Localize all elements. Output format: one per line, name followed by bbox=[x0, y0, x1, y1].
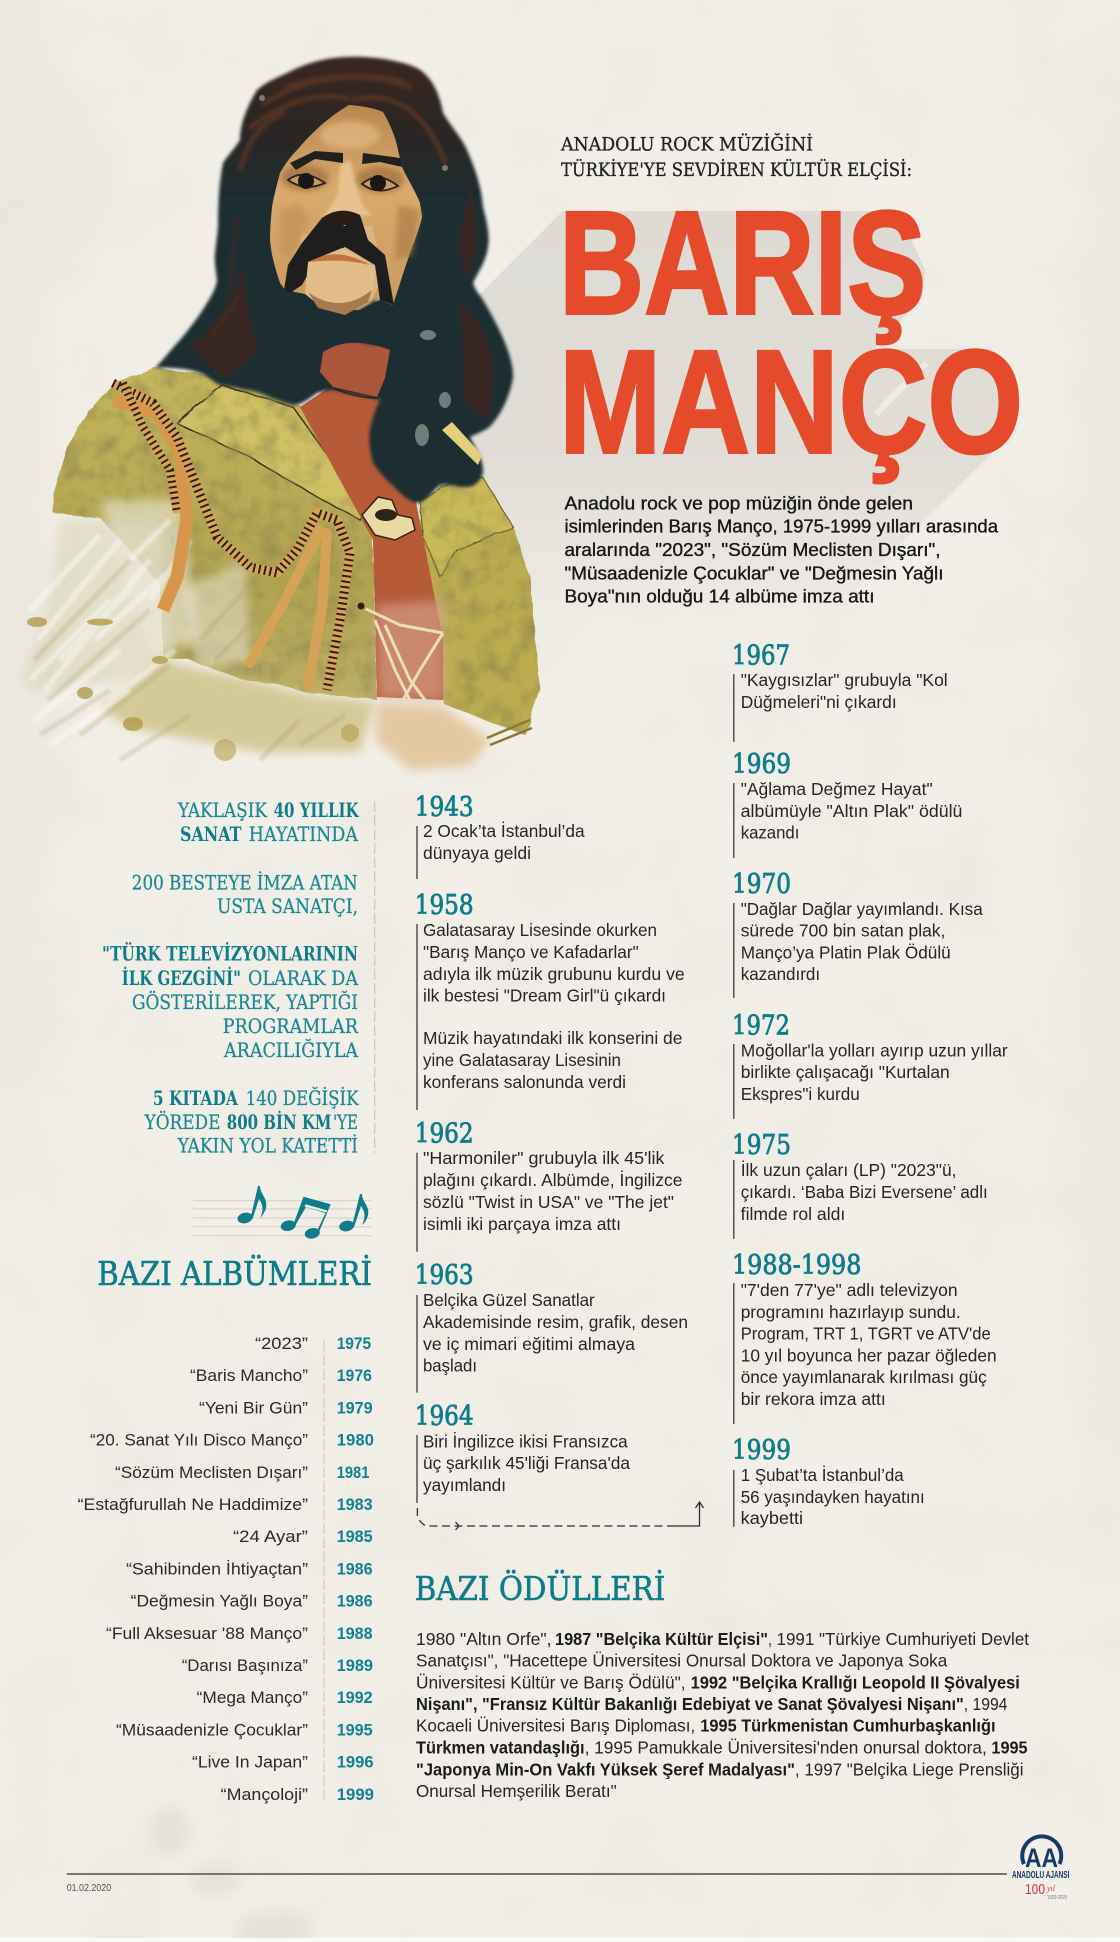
timeline entry: 1988-1998: 10 yıl boyunca her pazar öğleden bbox=[741, 1346, 997, 1366]
album list: “Baris Mancho” bbox=[190, 1366, 308, 1385]
album list: 1999 bbox=[337, 1785, 374, 1804]
album list: “Full Aksesuar '88 Manço” bbox=[106, 1624, 308, 1643]
intro paragraph: Anadolu rock ve pop müziğin önde gelen bbox=[564, 493, 913, 513]
timeline entry: 1958: Müzik hayatındaki ilk konserini de bbox=[423, 1028, 682, 1048]
portrait: eyelet bbox=[356, 602, 366, 610]
timeline entry: 1967 bbox=[732, 640, 948, 742]
portrait: paint smudges bbox=[27, 617, 359, 761]
timeline entry: 1964 bbox=[415, 1401, 630, 1503]
album list: “2023” bbox=[255, 1334, 308, 1353]
album list: “Live In Japan” bbox=[192, 1753, 308, 1772]
timeline entry: 1970: Manço’ya Platin Plak Ödülü bbox=[741, 942, 951, 962]
timeline entry: 1969: 1969 bbox=[732, 749, 791, 780]
album list: “Mega Manço” bbox=[197, 1688, 308, 1707]
awards paragraph: 1980 "Altın Orfe", bbox=[416, 1629, 552, 1649]
awards paragraph: Nişanı", "Fransız Kültür Bakanlığı Edebiyat ve Sanat Şövalyesi Nişanı" bbox=[416, 1694, 964, 1714]
awards paragraph: 1987 "Belçika Kültür Elçisi" bbox=[555, 1629, 768, 1649]
Anadolu Ajansi logo: ANADOLU AJANSI bbox=[1012, 1870, 1070, 1881]
timeline entry: 1970: sürede 700 bin satan plak, bbox=[741, 921, 945, 941]
portrait: orange shirt bbox=[300, 385, 443, 700]
timeline entry: 1988-1998: "7'den 77'ye" adlı televizyon bbox=[741, 1280, 958, 1300]
album list: 1976 bbox=[337, 1366, 372, 1385]
portrait: striped cord bbox=[113, 383, 350, 690]
timeline entry: 1975: 1975 bbox=[732, 1130, 791, 1161]
career summary statements: HAYATINDA bbox=[249, 823, 359, 846]
long shadow behind title bbox=[124, 211, 1020, 650]
timeline entry: 1963: Akademisinde resim, grafik, desen bbox=[423, 1312, 688, 1332]
timeline entry: 1958: "Barış Manço ve Kafadarlar" bbox=[423, 942, 639, 962]
timeline entry: 1988-1998 bbox=[732, 1250, 997, 1424]
awards paragraph: Üniversitesi Kültür ve Barış Ödülü", bbox=[416, 1672, 686, 1692]
timeline entry: 1972: birlikte çalışacağı "Kurtalan bbox=[741, 1062, 950, 1082]
awards paragraph: , bbox=[768, 1629, 772, 1649]
timeline entry: 1943: dünyaya geldi bbox=[423, 843, 531, 863]
title bbox=[559, 182, 1023, 484]
timeline entry: 1999: kaybetti bbox=[741, 1508, 803, 1528]
awards paragraph: , 1994 bbox=[964, 1694, 1008, 1714]
career summary statements: 200 BESTEYE İMZA ATAN bbox=[132, 870, 358, 894]
timeline entry: 1962: sözlü "Twist in USA" ve "The jet" bbox=[423, 1192, 674, 1212]
awards paragraph: 1995 bbox=[991, 1737, 1028, 1757]
timeline entry: 1970: kazandırdı bbox=[741, 964, 820, 984]
timeline entry: 1962: 1962 bbox=[415, 1119, 474, 1150]
awards paragraph: Türkmen vatandaşlığı bbox=[416, 1737, 585, 1757]
timeline entry: 1988-1998: 1988-1998 bbox=[732, 1250, 861, 1281]
timeline entry: 1967: Düğmeleri"ni çıkardı bbox=[741, 692, 897, 712]
album list: 1975 bbox=[337, 1334, 371, 1353]
timeline entry: 1963: başladı bbox=[423, 1356, 477, 1376]
intro paragraph: aralarında "2023", "Sözüm Meclisten Dışarı", bbox=[564, 540, 940, 560]
portrait of Barış Manço bbox=[22, 57, 540, 770]
album list: 1980 bbox=[337, 1431, 374, 1450]
portrait: streaked sleeve fade bbox=[22, 500, 375, 760]
awards paragraph: "Japonya Min-On Vakfı Yüksek Şeref Madalyası" bbox=[416, 1759, 795, 1779]
album list: 1985 bbox=[337, 1527, 373, 1546]
album list: “Sözüm Meclisten Dışarı” bbox=[115, 1463, 308, 1482]
timeline entry: 1964: 1964 bbox=[415, 1401, 474, 1432]
timeline entry: 1969: albümüyle "Altın Plak" ödülü bbox=[741, 801, 962, 821]
career summary statements: OLARAK DA bbox=[248, 967, 359, 990]
face: eyebrows bbox=[290, 151, 402, 170]
timeline entry: 1963: 1963 bbox=[415, 1260, 474, 1291]
heading: awards: BAZI ÖDÜLLERİ bbox=[415, 1570, 665, 1608]
portrait: hair bbox=[155, 57, 513, 503]
timeline entry: 1958 bbox=[415, 890, 685, 1110]
timeline entry: 1962 bbox=[415, 1119, 682, 1252]
timeline entry: 1969: kazandı bbox=[741, 823, 799, 843]
album list: 1986 bbox=[337, 1559, 373, 1578]
Anadolu Ajansi logo: 100 bbox=[1025, 1881, 1045, 1898]
timeline entry: 1988-1998: bir rekora imza attı bbox=[741, 1389, 886, 1409]
timeline entry: 1972: Moğollar'la yolları ayırıp uzun yıllar bbox=[741, 1041, 1008, 1061]
timeline entry: 1943 bbox=[415, 792, 585, 879]
portrait: orange band on shoulder bbox=[113, 400, 187, 610]
album list: 1996 bbox=[337, 1753, 374, 1772]
portrait: face bbox=[270, 105, 422, 345]
portrait: shirt fade bbox=[376, 600, 445, 700]
career summary statements: YAKIN YOL KATETTİ bbox=[177, 1134, 358, 1158]
album list: 1981 bbox=[337, 1463, 369, 1482]
album list: 1986 bbox=[337, 1592, 373, 1611]
career summary statements: 5 KITADA bbox=[153, 1087, 239, 1110]
timeline entry: 1999: 56 yaşındayken hayatını bbox=[741, 1487, 925, 1507]
awards paragraph bbox=[416, 1629, 1029, 1801]
timeline entry: 1963 bbox=[415, 1260, 688, 1393]
album list: “Yeni Bir Gün” bbox=[199, 1398, 308, 1417]
career summary statements: 800 BİN KM bbox=[227, 1110, 332, 1134]
career summary statements bbox=[102, 799, 359, 1158]
intro paragraph: Boya"nın olduğu 14 albüme imza attı bbox=[564, 587, 874, 607]
album list: “Değmesin Yağlı Boya” bbox=[131, 1592, 308, 1611]
timeline entry: 1958: Galatasaray Lisesinde okurken bbox=[423, 920, 657, 940]
awards paragraph: , 1997 "Belçika Liege Prensliği bbox=[795, 1759, 1024, 1779]
Anadolu Ajansi logo: yıl bbox=[1046, 1884, 1056, 1893]
career summary statements: 140 DEĞİŞİK bbox=[246, 1085, 359, 1110]
timeline entry: 1964: Biri İngilizce ikisi Fransızca bbox=[423, 1432, 628, 1452]
face: eyes bbox=[288, 173, 398, 191]
portrait: right hair lapel highlights bbox=[442, 422, 482, 465]
intro paragraph: isimlerinden Barış Manço, 1975-1999 yılları arasında bbox=[564, 517, 999, 537]
timeline entry: 1943: 2 Ocak’ta İstanbul’da bbox=[423, 821, 585, 841]
album list: 1989 bbox=[337, 1656, 373, 1675]
timeline entry: 1963: Belçika Güzel Sanatlar bbox=[423, 1290, 595, 1310]
album list: “20. Sanat Yılı Disco Manço” bbox=[90, 1431, 308, 1450]
timeline entry: 1972: 1972 bbox=[732, 1011, 790, 1042]
intro heading bbox=[560, 132, 912, 181]
intro heading: ANADOLU ROCK MÜZİĞİNİ bbox=[560, 132, 813, 156]
Anadolu Ajansi logo: 1920-2020 bbox=[1047, 1895, 1067, 1901]
portrait: braids bbox=[250, 530, 327, 685]
timeline entry: 1962: plağını çıkardı. Albümde, İngilizce bbox=[423, 1170, 682, 1190]
career summary statements: İLK GEZGİNİ" bbox=[122, 966, 241, 990]
awards paragraph: , 1995 Pamukkale Üniversitesi'nden onursal doktora, bbox=[585, 1737, 987, 1757]
timeline entry: 1970 bbox=[732, 869, 983, 998]
career summary statements: ARACILIĞIYLA bbox=[223, 1037, 359, 1062]
awards paragraph: 1992 "Belçika Krallığı Leopold II Şövalyesi bbox=[691, 1672, 1020, 1692]
awards paragraph: Onursal Hemşerilik Beratı" bbox=[416, 1781, 617, 1801]
awards paragraph: 1995 Türkmenistan Cumhurbaşkanlığı bbox=[700, 1716, 996, 1736]
timeline entry: 1967: "Kaygısızlar" grubuyla "Kol bbox=[741, 670, 948, 690]
music notes icon bbox=[193, 1186, 372, 1240]
Anadolu Ajansi logo: AA bbox=[1025, 1843, 1058, 1873]
timeline entry: 1975 bbox=[732, 1130, 988, 1239]
timeline entry: 1967: 1967 bbox=[732, 640, 790, 671]
timeline entry: 1958: konferans salonunda verdi bbox=[423, 1072, 626, 1092]
portrait: turtleneck bbox=[320, 343, 390, 397]
career summary statements: 40 YILLIK bbox=[274, 799, 359, 822]
title: MANÇO bbox=[559, 320, 1023, 484]
career summary statements: GÖSTERİLEREK, YAPTIĞI bbox=[132, 989, 358, 1014]
album list: 1979 bbox=[337, 1398, 373, 1417]
portrait: hair speckles bbox=[259, 95, 451, 446]
face: moustache and chin beard bbox=[284, 215, 394, 305]
career summary statements: YÖREDE bbox=[144, 1109, 220, 1134]
career summary statements: PROGRAMLAR bbox=[223, 1015, 359, 1038]
timeline entry: 1963: ve iç mimari eğitimi almaya bbox=[423, 1334, 635, 1354]
timeline entry: 1969: "Ağlama Değmez Hayat" bbox=[741, 779, 933, 799]
album list: “Müsaadenizle Çocuklar” bbox=[116, 1720, 308, 1739]
timeline entry: 1970: 1970 bbox=[732, 869, 791, 900]
intro paragraph: "Müsaadenizle Çocuklar" ve "Değmesin Yağlı bbox=[564, 563, 944, 583]
intro heading: TÜRKİYE'YE SEVDİREN KÜLTÜR ELÇİSİ: bbox=[561, 158, 912, 181]
awards paragraph: Kocaeli Üniversitesi Barış Diploması, bbox=[416, 1716, 695, 1736]
career summary statements: YAKLAŞIK bbox=[177, 799, 267, 822]
timeline entry: 1958: ilk bestesi "Dream Girl"ü çıkardı bbox=[423, 986, 666, 1006]
timeline entry: 1975: çıkardı. ‘Baba Bizi Eversene’ adlı bbox=[741, 1182, 988, 1202]
timeline entry: 1964: üç şarkılık 45'liği Fransa'da bbox=[423, 1453, 630, 1473]
timeline entry: 1970: "Dağlar Dağlar yayımlandı. Kısa bbox=[741, 899, 983, 919]
album list: “Sahibinden İhtiyaçtan” bbox=[126, 1559, 308, 1578]
album list bbox=[78, 1334, 374, 1804]
timeline entry: 1962: isimli iki parçaya imza attı bbox=[423, 1214, 621, 1234]
arrow connecting timeline columns bbox=[417, 1502, 704, 1530]
awards paragraph: Sanatçısı", "Hacettepe Üniversitesi Onursal Doktora ve Japonya Soka bbox=[416, 1651, 948, 1671]
album list: 1995 bbox=[337, 1720, 373, 1739]
title: BARIŞ bbox=[559, 182, 926, 346]
album list: “Mançoloji” bbox=[221, 1785, 308, 1804]
timeline entry: 1972 bbox=[732, 1011, 1008, 1119]
timeline entry: 1988-1998: Program, TRT 1, TGRT ve ATV'de bbox=[741, 1324, 991, 1344]
career summary statements: "TÜRK TELEVİZYONLARININ bbox=[102, 941, 358, 966]
timeline entry: 1975: filmde rol aldı bbox=[741, 1204, 845, 1224]
portrait: badge bbox=[362, 497, 415, 540]
timeline entry: 1969 bbox=[732, 749, 962, 858]
album list: “24 Ayar” bbox=[233, 1527, 308, 1546]
career summary statements: USTA SANATÇI, bbox=[217, 895, 358, 918]
timeline entry: 1975: İlk uzun çaları (LP) "2023"ü, bbox=[741, 1160, 956, 1180]
album list: 1992 bbox=[337, 1688, 373, 1707]
timeline entry: 1958: yine Galatasaray Lisesinin bbox=[423, 1050, 621, 1070]
footer rule and date: 01.02.2020 bbox=[67, 1883, 112, 1894]
timeline entry: 1988-1998: önce yayımlanarak kırılması güç bbox=[741, 1367, 987, 1387]
album list: “Estağfurullah Ne Haddimize” bbox=[78, 1495, 308, 1514]
timeline entry: 1999: 1 Şubat’ta İstanbul’da bbox=[741, 1465, 904, 1485]
portrait: cuff stripes bbox=[487, 720, 532, 745]
timeline entry: 1958: 1958 bbox=[415, 890, 474, 921]
timeline entry: 1988-1998: programını hazırlayıp sundu. bbox=[741, 1302, 961, 1322]
heading: albums: BAZI ALBÜMLERİ bbox=[97, 1255, 372, 1293]
timeline entry: 1999: 1999 bbox=[732, 1435, 791, 1466]
album list: 1988 bbox=[337, 1624, 373, 1643]
timeline entry: 1964: yayımlandı bbox=[423, 1475, 506, 1495]
timeline entry: 1972: Ekspres"i kurdu bbox=[741, 1084, 860, 1104]
awards paragraph: 1991 "Türkiye Cumhuriyeti Devlet bbox=[776, 1629, 1029, 1649]
album list: 1983 bbox=[337, 1495, 373, 1514]
timeline entry: 1962: "Harmoniler" grubuyla ilk 45'lik bbox=[423, 1148, 665, 1168]
portrait: jacket bbox=[53, 368, 540, 735]
timeline entry: 1943: 1943 bbox=[415, 792, 474, 823]
career summary statements: 'YE bbox=[333, 1111, 358, 1134]
portrait: lacing bbox=[362, 607, 443, 700]
intro paragraph bbox=[564, 493, 999, 607]
album list: “Darısı Başınıza” bbox=[182, 1656, 308, 1675]
portrait: hand bbox=[375, 703, 490, 770]
timeline entry: 1958: adıyla ilk müzik grubunu kurdu ve bbox=[423, 964, 685, 984]
portrait: collar line bbox=[333, 388, 378, 398]
Anadolu Ajansi logo bbox=[1012, 1836, 1070, 1901]
timeline entry: 1999 bbox=[732, 1435, 925, 1528]
face: nose shadow bbox=[322, 211, 360, 226]
career summary statements: SANAT bbox=[180, 823, 242, 846]
